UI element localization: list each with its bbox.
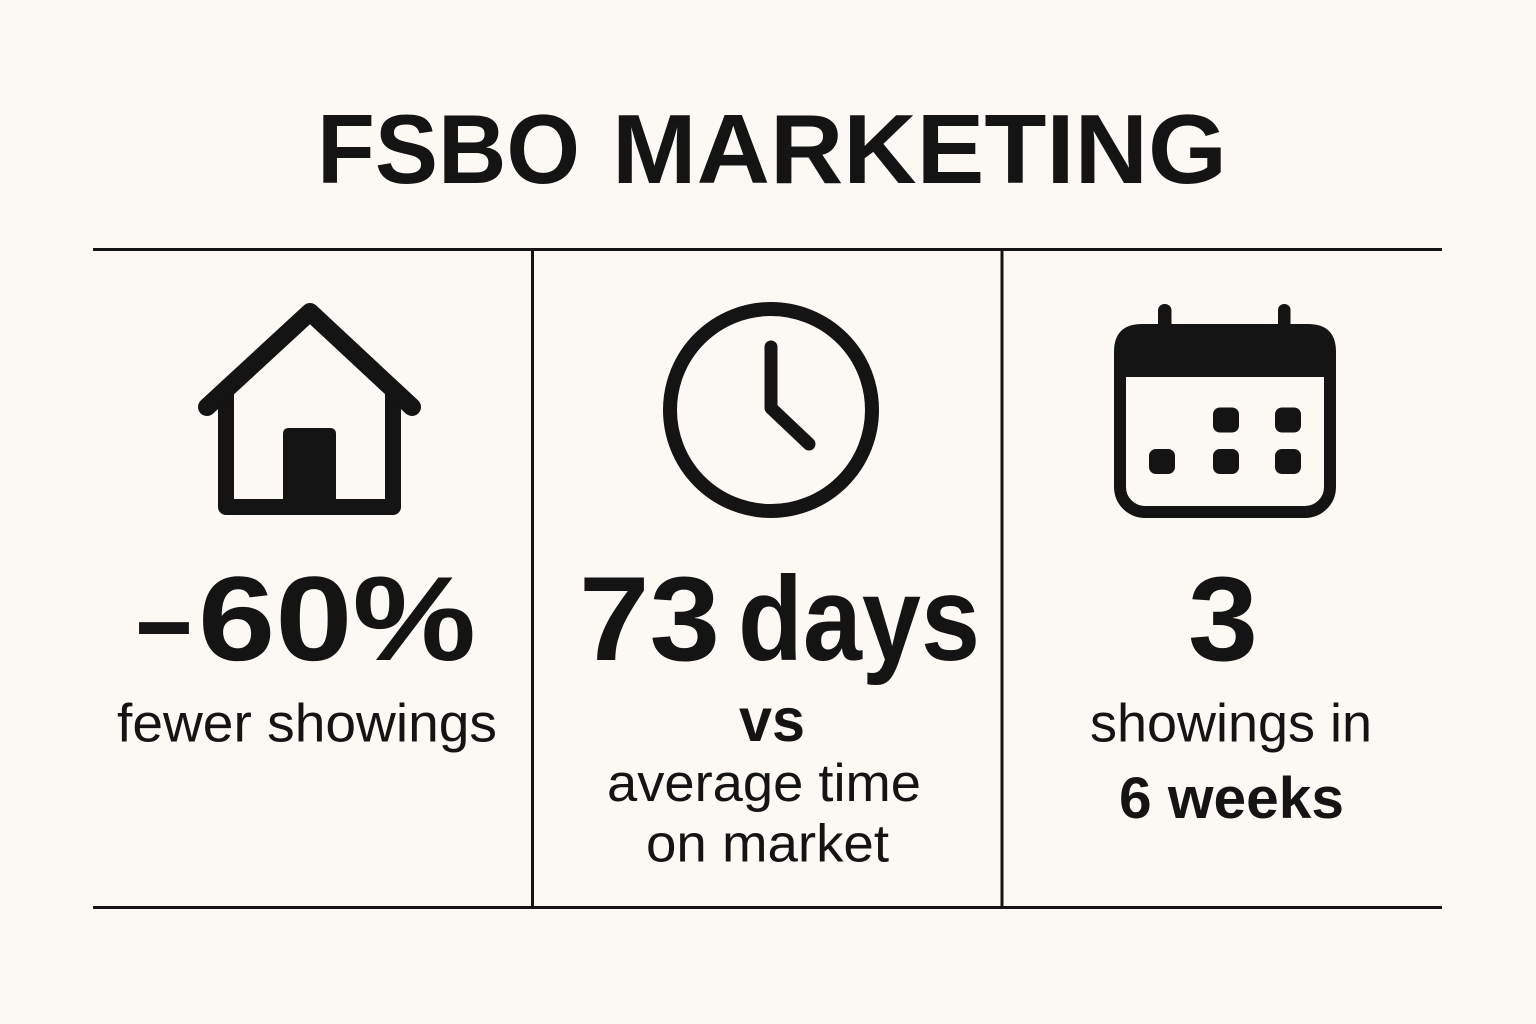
statistic: 3: 3 — [1188, 552, 1258, 686]
panel: fewer showings — [117, 312, 497, 754]
label: showings in: showings in — [1090, 694, 1372, 754]
statistic: 73 days: days — [738, 552, 980, 686]
label: 6 weeks: 6 weeks — [1119, 766, 1344, 831]
statistic: -60%: 60% — [198, 552, 476, 686]
label: on market: on market — [646, 814, 889, 874]
icon: calendar — [1114, 304, 1336, 512]
statistic: 73 days: 73 — [579, 552, 720, 686]
title — [317, 94, 1227, 204]
icon: house — [207, 312, 412, 507]
statistic: -60%: – — [136, 552, 192, 686]
statistic: 73 days — [579, 552, 980, 686]
panel: showings in 6 weeks — [1090, 304, 1372, 831]
panel: days on market — [579, 309, 980, 874]
title: MARKETING — [612, 94, 1227, 204]
label: vs: vs — [739, 686, 805, 754]
label: average time: average time — [607, 754, 921, 813]
label: fewer showings: fewer showings — [117, 694, 497, 754]
icon: clock — [670, 309, 872, 511]
title: FSBO — [317, 94, 580, 204]
